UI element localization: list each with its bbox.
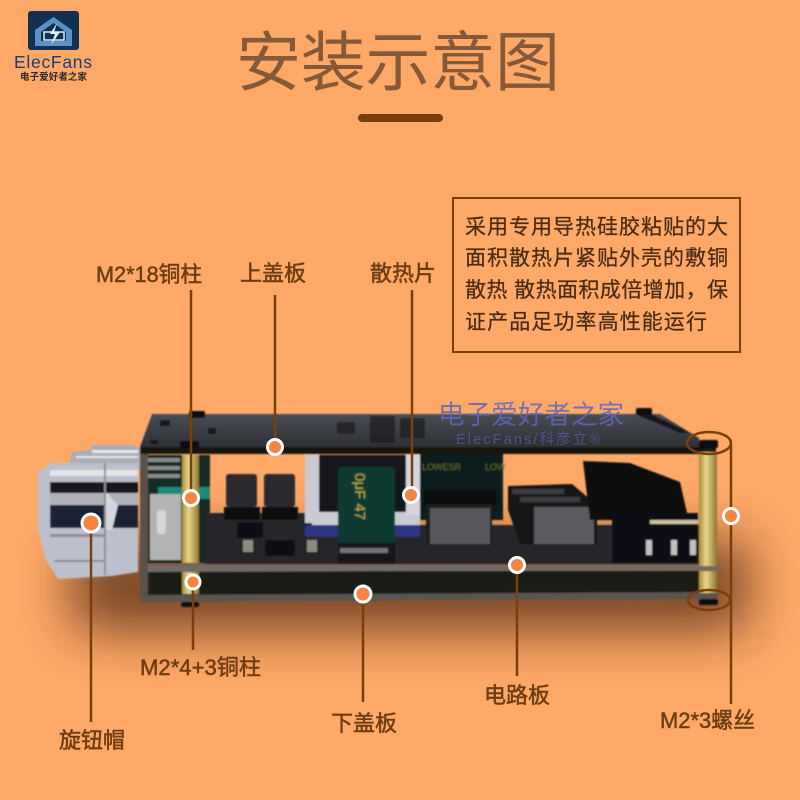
label: circuit board: 电路板 bbox=[484, 683, 550, 708]
leader: circuit board bbox=[510, 558, 524, 676]
label: heatsink: 散热片 bbox=[370, 261, 436, 286]
inductor capacitor bbox=[420, 454, 506, 544]
label: M2*3 screw: M2*3螺丝 bbox=[660, 708, 755, 733]
logo icon: house bbox=[28, 11, 79, 50]
top cover board bbox=[140, 411, 716, 454]
logo chinese name: 电子爱好者之家 bbox=[20, 71, 87, 83]
product photo: amplifier board assembly bbox=[38, 408, 720, 607]
knob cap bbox=[38, 445, 140, 579]
potentiometer area bbox=[148, 455, 210, 563]
triple inductor block bbox=[508, 484, 597, 544]
label: M2*4+3 standoff: M2*4+3铜柱 bbox=[140, 655, 261, 680]
board shadow bbox=[70, 540, 750, 632]
callout: heat spreading description: 采用专用导热硅胶粘贴的大 bbox=[465, 216, 728, 239]
callout: heat spreading description: 证产品足功率高性能运行 bbox=[465, 311, 707, 334]
leader: heatsink bbox=[404, 290, 418, 502]
watermark: ElecFans/科彦立® bbox=[456, 431, 600, 448]
leader: M2*3 screws bracket bbox=[687, 432, 738, 704]
large capacitor bbox=[338, 467, 395, 564]
label: M2*18 standoff: M2*18铜柱 bbox=[96, 262, 202, 287]
audio jack bbox=[612, 513, 698, 563]
callout: heat spreading description: 面积散热片紧贴外壳的敷铜 bbox=[465, 247, 728, 270]
left standoff bbox=[180, 411, 205, 607]
title underline bbox=[358, 114, 443, 122]
large capacitor: 0μF 47 bbox=[351, 473, 368, 520]
bottom cover board bbox=[140, 592, 718, 602]
main circuit area bbox=[205, 513, 700, 564]
circuit board edge bbox=[148, 565, 720, 572]
gap below circuit board bbox=[148, 571, 700, 595]
logo wordmark: ElecFans bbox=[14, 52, 92, 72]
leader: knob cap bbox=[82, 514, 100, 722]
logo: ElecFans bbox=[14, 11, 92, 83]
callout: heat spreading description bbox=[453, 198, 740, 352]
right standoff bbox=[636, 408, 718, 605]
watermark bbox=[438, 400, 624, 448]
label: knob cap: 旋钮帽 bbox=[59, 728, 125, 753]
leader: M2*18 standoff bbox=[184, 290, 198, 506]
leader: bottom cover bbox=[355, 586, 371, 702]
inductor capacitor: LOWESR bbox=[422, 462, 462, 472]
label: top cover: 上盖板 bbox=[240, 261, 306, 286]
callout: heat spreading description: 散热 散热面积成倍增加，保 bbox=[465, 279, 728, 302]
leader: M2*4+3 standoff bbox=[186, 575, 200, 650]
label: bottom cover: 下盖板 bbox=[331, 711, 397, 736]
watermark: 电子爱好者之家 bbox=[438, 400, 624, 430]
left side plate bbox=[140, 454, 148, 600]
small capacitors bbox=[224, 474, 317, 556]
heatsink bbox=[305, 455, 420, 537]
inductor capacitor: LOW bbox=[485, 462, 506, 472]
leader: top cover bbox=[268, 295, 282, 454]
title: 安装示意图 bbox=[236, 26, 560, 99]
black connector bbox=[583, 461, 687, 520]
